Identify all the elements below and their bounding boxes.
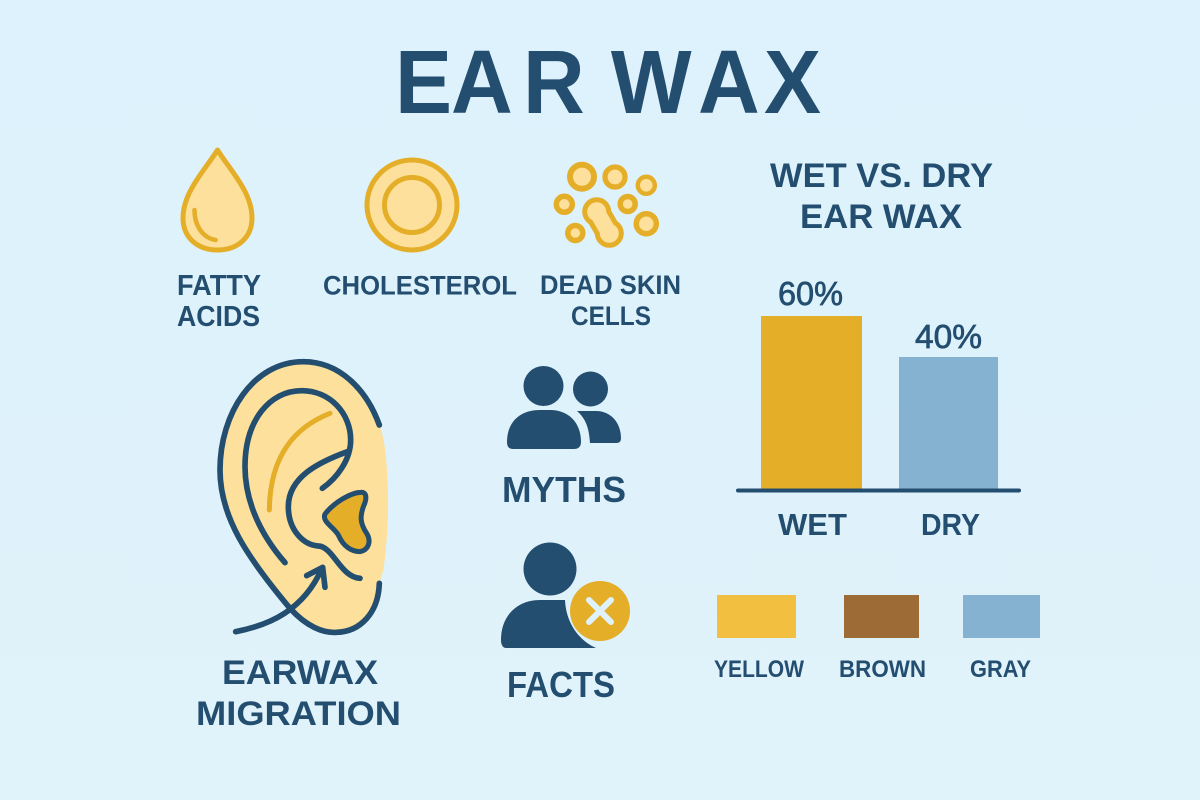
icon: dead skin cells [556, 165, 656, 248]
icon: ear with wax and migration arrow [220, 362, 388, 632]
swatch: gray [963, 595, 1040, 683]
axis label: wet: WET [778, 507, 847, 542]
label: earwax migration [196, 654, 401, 733]
label: dead skin cells: CELLS [571, 301, 651, 331]
arrow [236, 567, 325, 632]
panel: colour legend [714, 595, 1040, 683]
chart heading: EAR WAX [800, 198, 962, 236]
label: facts: FACTS [507, 664, 615, 705]
icon: cholesterol [367, 160, 457, 250]
label: earwax migration: MIGRATION [196, 695, 401, 733]
swatch: gray: GRAY [970, 656, 1031, 683]
label: dead skin cells: DEAD SKIN [540, 270, 681, 300]
chart heading [770, 157, 993, 236]
swatch: yellow [714, 595, 804, 683]
axis [738, 488, 1019, 492]
label: dead skin cells [540, 270, 681, 331]
axis label: dry: DRY [921, 507, 980, 542]
swatch: brown [839, 595, 926, 683]
panel: wet vs dry bar chart [738, 157, 1019, 542]
bar: dry 40% [899, 318, 998, 489]
swatch: yellow: YELLOW [714, 656, 804, 683]
label: fatty acids [177, 270, 261, 333]
panel: composition [177, 150, 681, 333]
chart heading: WET VS. DRY [770, 157, 993, 195]
label: fatty acids: FATTY [177, 270, 261, 302]
swatch: brown: BROWN [839, 656, 926, 683]
label: fatty acids: ACIDS [177, 301, 260, 333]
label: cholesterol: CHOLESTEROL [323, 270, 517, 300]
icon: fatty acids drop [183, 150, 252, 250]
title: EAR WAX [395, 32, 821, 132]
icon: facts person with x badge [501, 542, 630, 648]
label: earwax migration: EARWAX [222, 654, 378, 692]
bar: wet 60% [761, 275, 862, 489]
label: myths: MYTHS [502, 469, 626, 510]
bar: dry 40%: 40% [915, 318, 982, 355]
bar: wet 60%: 60% [778, 275, 843, 312]
earwax blob [324, 492, 369, 552]
peanut-shaped cell [582, 197, 624, 248]
icon: myths people [507, 366, 621, 449]
